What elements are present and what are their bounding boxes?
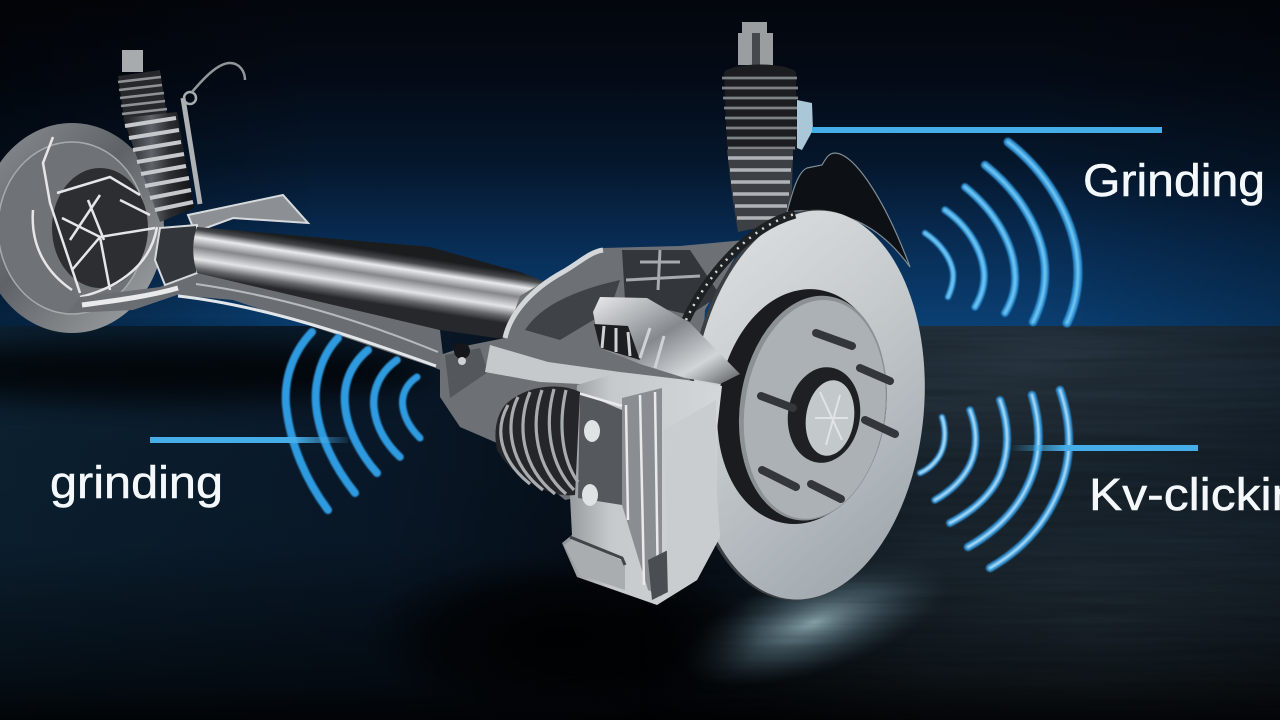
sound waves: lower left (grinding) bbox=[286, 332, 420, 510]
callout: Kv-clicking right bbox=[1010, 445, 1280, 520]
front strut with coil spring bbox=[722, 22, 813, 232]
callout: Grinding top right: Grinding bbox=[1083, 155, 1265, 206]
rear lower arm bbox=[67, 270, 445, 372]
callout: grinding lower left bbox=[50, 437, 348, 508]
brake caliper bbox=[562, 297, 740, 605]
rear axle assembly bbox=[0, 50, 545, 372]
caliper body bbox=[562, 372, 722, 605]
caliper upper housing bbox=[593, 297, 740, 384]
rear hub joint bbox=[155, 225, 197, 285]
callout: grinding lower left: grinding bbox=[50, 457, 223, 508]
front knuckle and arm bbox=[440, 240, 745, 500]
callout: Grinding top right bbox=[812, 127, 1265, 206]
wheel hub bbox=[782, 362, 866, 468]
caliper piston bellows bbox=[495, 386, 580, 495]
dust shield behind disc bbox=[787, 153, 910, 267]
sound waves: upper right (Grinding) bbox=[925, 142, 1078, 323]
rear brake disc bbox=[0, 123, 164, 333]
wheel studs bbox=[761, 333, 895, 499]
rear brake hose bbox=[183, 63, 245, 204]
rear coil spring strut bbox=[118, 50, 194, 222]
rotor hat bbox=[702, 278, 902, 535]
axle tube bbox=[193, 227, 545, 340]
brake rotor bbox=[671, 199, 941, 611]
sound waves: right (Kv-clicking) bbox=[920, 390, 1069, 568]
rear upper bracket bbox=[188, 195, 308, 232]
